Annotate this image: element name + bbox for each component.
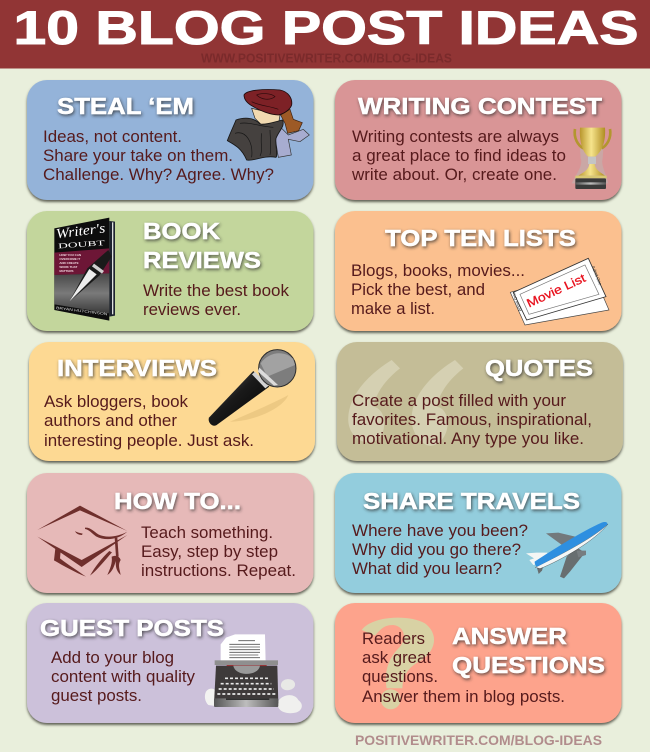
panel: answer questions bbox=[335, 603, 622, 723]
body: steal em: Ideas, not content. bbox=[43, 128, 182, 146]
heading: book reviews: BOOK bbox=[143, 218, 220, 244]
heading: quotes: QUOTES bbox=[485, 355, 593, 381]
panel: how to bbox=[27, 473, 314, 593]
body: writing contest: a great place to find ideas to bbox=[352, 147, 566, 165]
body: share travels: What did you learn? bbox=[352, 560, 502, 578]
body: share travels bbox=[352, 522, 528, 578]
body: writing contest bbox=[351, 128, 566, 184]
panel: quotes bbox=[337, 342, 623, 461]
icon: thief in hat and cloak bbox=[227, 90, 309, 160]
body: how to: Teach something. bbox=[141, 524, 273, 542]
icon: writer's doubt book: Writer's bbox=[55, 221, 107, 242]
title: 10 BLOG POST IDEAS bbox=[14, 1, 638, 54]
body: how to: instructions. Repeat. bbox=[141, 562, 296, 580]
heading: answer questions bbox=[452, 623, 605, 678]
icon: microphone bbox=[209, 350, 296, 426]
heading: top ten lists: TOP TEN LISTS bbox=[385, 225, 576, 251]
body: writing contest: Writing contests are always bbox=[352, 128, 559, 146]
icon: writer's doubt book bbox=[54, 218, 115, 321]
icon: large question mark bbox=[362, 618, 434, 709]
body: steal em: Challenge. Why? Agree. Why? bbox=[43, 166, 274, 184]
body: book reviews: Write the best book bbox=[143, 282, 290, 300]
body: top ten lists: Blogs, books, movies... bbox=[351, 262, 525, 280]
heading: interviews: INTERVIEWS bbox=[57, 355, 217, 381]
icon: movie list tickets bbox=[510, 258, 609, 325]
footer url: POSITIVEWRITER.COM/BLOG-IDEAS bbox=[355, 732, 602, 748]
body: answer questions bbox=[362, 630, 565, 706]
body: interviews: authors and other bbox=[44, 412, 178, 430]
icon: airplane bbox=[526, 522, 608, 578]
body: guest posts: Add to your blog bbox=[51, 649, 174, 667]
panel: book reviews bbox=[27, 211, 314, 331]
body: guest posts: content with quality bbox=[51, 668, 196, 686]
body: interviews: Ask bloggers, book bbox=[44, 393, 189, 411]
icon: writer's doubt book: OVERCOME IT bbox=[59, 257, 80, 261]
icon: writer's doubt book: HOW YOU CAN bbox=[59, 253, 81, 257]
icon: typewriter bbox=[205, 634, 302, 713]
body: answer questions: Answer them in blog posts. bbox=[362, 688, 565, 706]
body: share travels: Where have you been? bbox=[352, 522, 528, 540]
panel: share travels bbox=[335, 473, 622, 593]
icon: graduation cap bbox=[37, 506, 127, 577]
body: answer questions: Readers bbox=[362, 630, 425, 648]
body: book reviews bbox=[143, 282, 290, 319]
icon: writer's doubt book: DOUBT bbox=[58, 238, 106, 250]
heading: steal em: STEAL ‘EM bbox=[57, 93, 194, 119]
body: steal em bbox=[43, 128, 274, 184]
body: how to bbox=[141, 524, 296, 580]
icon: writer's doubt book: AND CREATE bbox=[59, 261, 79, 265]
icon: writer's doubt book: BRYAN HUTCHINSON bbox=[56, 306, 108, 316]
icon: movie list tickets: Admit One bbox=[591, 265, 603, 287]
panel: writing contest bbox=[335, 80, 622, 200]
heading: writing contest: WRITING CONTEST bbox=[358, 93, 603, 119]
body: quotes: motivational. Any type you like. bbox=[352, 430, 584, 448]
body: top ten lists: make a list. bbox=[351, 300, 435, 318]
panel: top ten lists bbox=[335, 211, 622, 331]
heading: answer questions: ANSWER bbox=[452, 623, 567, 649]
icon: movie list tickets: Movie List bbox=[524, 271, 588, 310]
body: answer questions: ask great bbox=[362, 649, 431, 667]
body: writing contest: write about. Or, create one. bbox=[351, 166, 557, 184]
body: top ten lists bbox=[351, 262, 525, 318]
body: top ten lists: Pick the best, and bbox=[351, 281, 485, 299]
icon: writer's doubt book: WORK THAT bbox=[59, 265, 78, 269]
heading: share travels: SHARE TRAVELS bbox=[363, 488, 580, 514]
body: quotes: Create a post filled with your bbox=[352, 392, 567, 410]
body: answer questions: questions. bbox=[362, 668, 438, 686]
icon: writer's doubt book: MATTERS bbox=[59, 269, 74, 273]
panel: interviews bbox=[29, 342, 315, 461]
body: book reviews: reviews ever. bbox=[143, 301, 241, 319]
heading: book reviews bbox=[143, 218, 261, 273]
body: interviews: interesting people. Just ask. bbox=[44, 432, 254, 450]
heading: how to: HOW TO... bbox=[114, 488, 241, 514]
body: guest posts: guest posts. bbox=[51, 687, 142, 705]
body: share travels: Why did you go there? bbox=[352, 541, 521, 559]
header url: WWW.POSITIVEWRITER.COM/BLOG-IDEAS bbox=[201, 52, 452, 66]
heading: book reviews: REVIEWS bbox=[143, 247, 261, 273]
body: how to: Easy, step by step bbox=[141, 543, 278, 561]
panel: steal em bbox=[27, 80, 314, 200]
body: guest posts bbox=[51, 649, 196, 705]
body: interviews bbox=[44, 393, 254, 450]
panel: guest posts bbox=[27, 603, 314, 723]
icon: large quotation marks bbox=[348, 360, 463, 446]
body: quotes bbox=[352, 392, 592, 448]
body: steal em: Share your take on them. bbox=[43, 147, 233, 165]
body: quotes: favorites. Famous, inspirational, bbox=[352, 411, 592, 429]
heading: answer questions: QUESTIONS bbox=[452, 652, 605, 678]
header banner bbox=[0, 0, 650, 68]
heading: guest posts: GUEST POSTS bbox=[40, 615, 224, 641]
icon: gold trophy bbox=[572, 128, 610, 189]
icon: movie list tickets: Admit One bbox=[511, 291, 523, 312]
